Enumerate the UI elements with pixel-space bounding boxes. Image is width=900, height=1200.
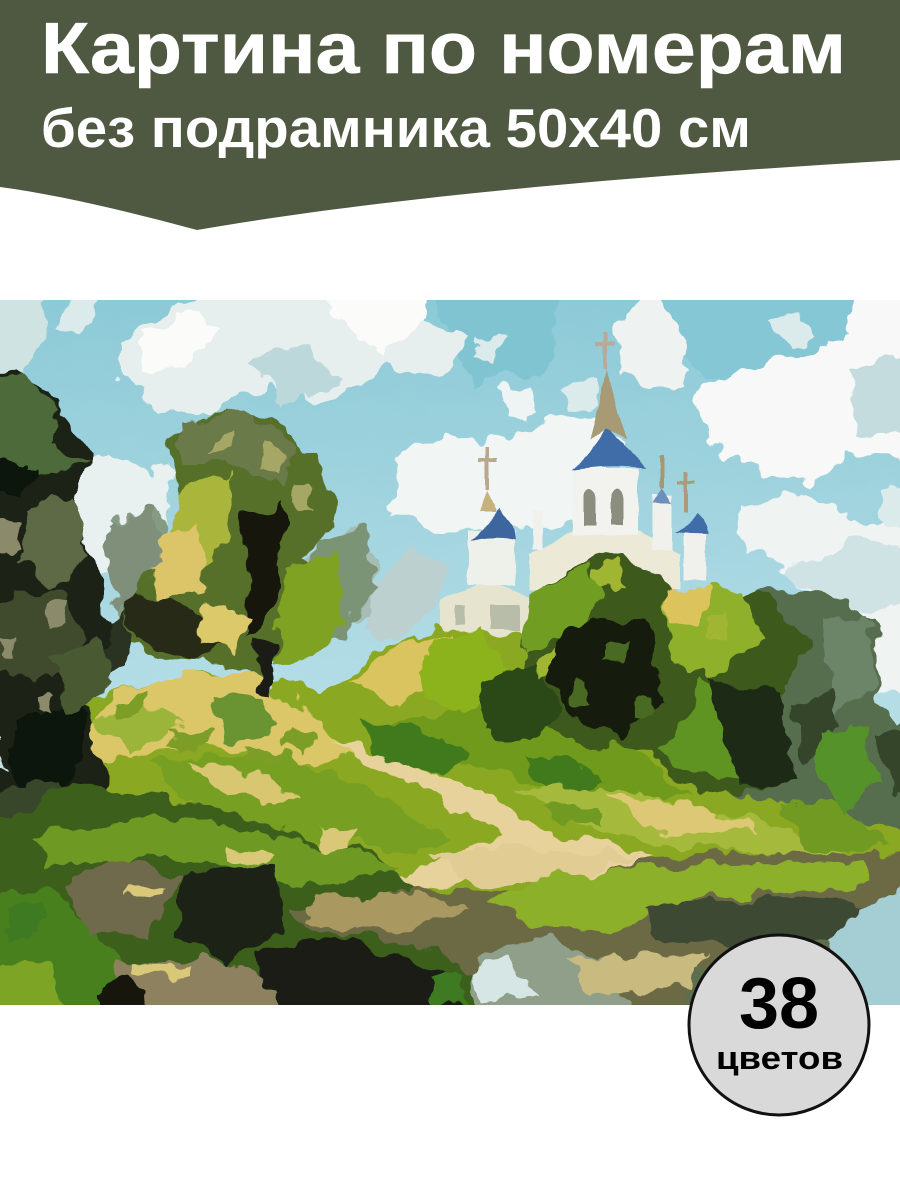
clouds xyxy=(0,279,900,701)
domes xyxy=(572,425,645,470)
sky xyxy=(0,259,900,1046)
windows xyxy=(584,490,623,525)
left dark trees xyxy=(0,372,115,907)
yellow meadow left xyxy=(84,671,450,856)
water reflection xyxy=(296,851,900,1046)
header banner xyxy=(0,0,900,230)
sky and clouds xyxy=(0,259,900,1046)
hill xyxy=(0,629,900,1046)
spires xyxy=(590,368,628,440)
number: 38 xyxy=(739,964,819,1044)
subtitle: без подрамника 50х40 см xyxy=(41,97,751,159)
path xyxy=(326,737,893,897)
landscape xyxy=(0,372,900,1046)
distant foliage xyxy=(110,511,900,835)
painting: church on a hill xyxy=(0,300,900,1005)
church xyxy=(440,332,708,640)
badge: 38 colours xyxy=(688,934,870,1116)
middle tree xyxy=(90,413,347,691)
right trees xyxy=(481,552,877,815)
label: цветов xyxy=(716,1040,843,1076)
left foreground xyxy=(0,784,481,1046)
title: Картина по номерам xyxy=(41,9,846,89)
